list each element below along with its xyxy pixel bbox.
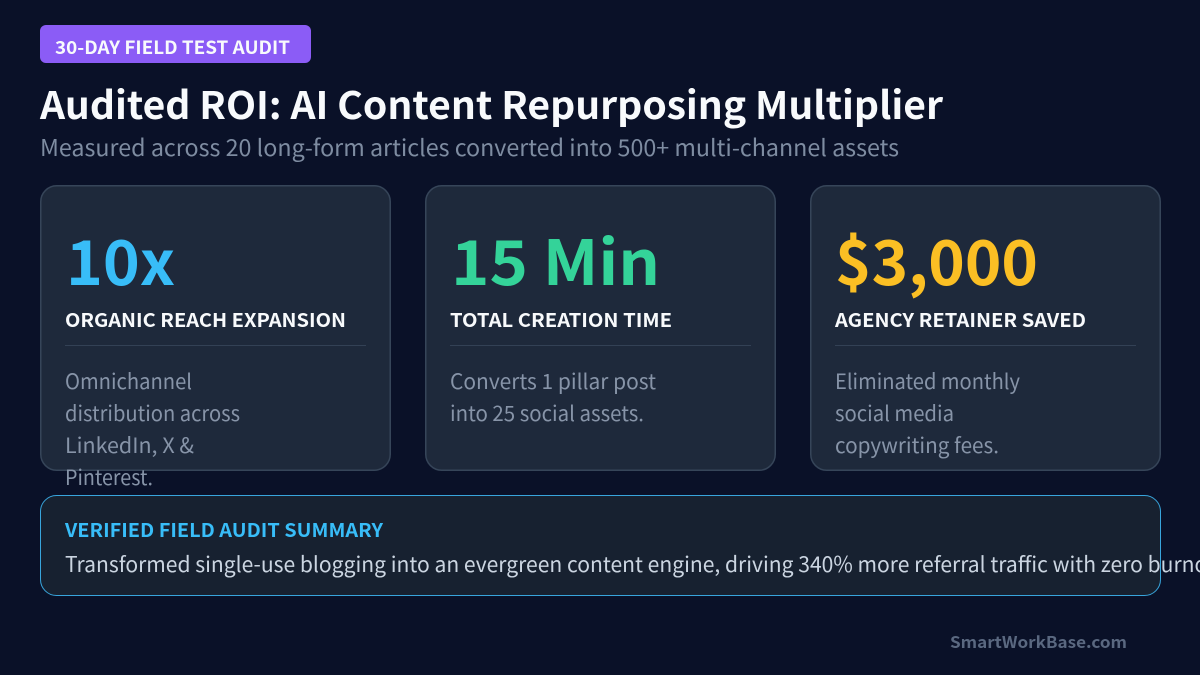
description: converts pillar post: into 25 social assets. [450, 398, 644, 428]
stat: 10x: 10x [66, 213, 175, 303]
subtitle: Measured across 20 long-form articles converted into 500+ multi-channel assets [40, 129, 899, 163]
label: total creation time: TOTAL CREATION TIME [450, 306, 672, 333]
description: omnichannel distribution: LinkedIn, X & [65, 430, 194, 460]
description: converts pillar post: Converts 1 pillar post [450, 366, 656, 396]
description: eliminated fees: social media [835, 398, 954, 428]
description: converts pillar post [450, 366, 656, 428]
description: omnichannel distribution: Pinterest. [65, 462, 153, 492]
panel: total creation time [426, 186, 775, 470]
description: omnichannel distribution: distribution across [65, 398, 240, 428]
stat: 15 Min: 15 Min [451, 213, 660, 303]
panel: verified field audit summary [40, 496, 1200, 596]
badge [40, 25, 311, 63]
panel: agency retainer saved [811, 186, 1160, 470]
label: agency retainer saved: AGENCY RETAINER SAVED [834, 306, 1086, 333]
summary heading: VERIFIED FIELD AUDIT SUMMARY [64, 516, 384, 543]
description: eliminated fees: copywriting fees. [835, 430, 999, 460]
description: eliminated fees [835, 366, 1020, 460]
description: omnichannel distribution: Omnichannel [65, 366, 192, 396]
description: eliminated fees: Eliminated monthly [835, 366, 1020, 396]
panel: organic reach expansion [41, 186, 390, 492]
stat: $3,000: $3,000 [835, 213, 1038, 303]
badge: 30-DAY FIELD TEST AUDIT [55, 34, 290, 60]
title: Audited ROI: AI Content Repurposing Multiplier [39, 75, 943, 130]
footer brand: SmartWorkBase.com [950, 629, 1127, 653]
description: omnichannel distribution [65, 366, 240, 492]
label: organic reach expansion: ORGANIC REACH EXPANSION [65, 306, 346, 333]
